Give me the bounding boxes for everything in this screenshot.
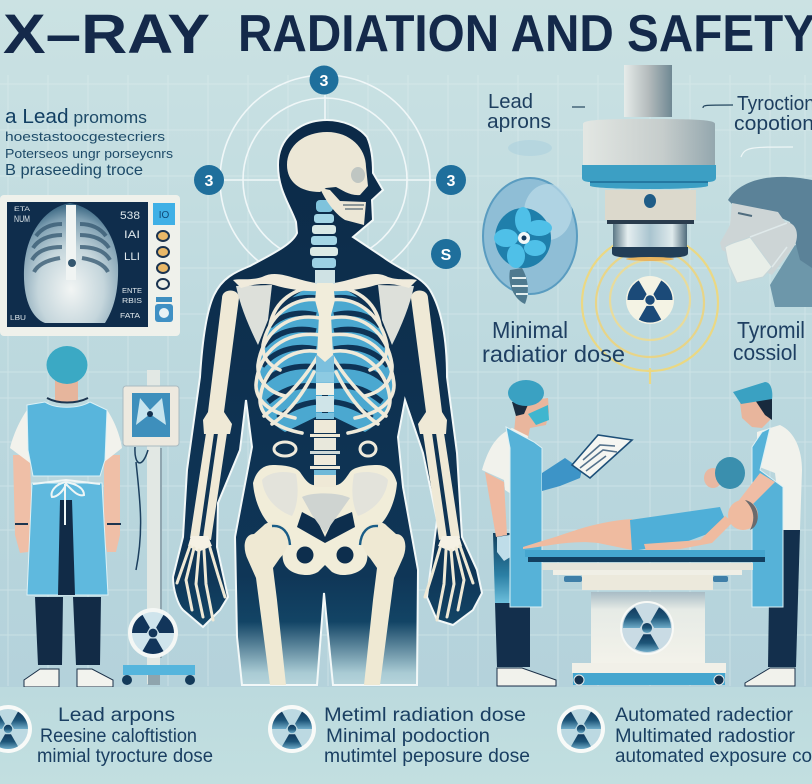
figure: patient lying on table [523, 500, 758, 551]
badge: left: 3 [205, 173, 214, 190]
trousers [35, 597, 101, 665]
control buttons [153, 203, 175, 322]
lower apron back [493, 533, 512, 603]
badge: lower right: S [441, 247, 452, 264]
surgical mask [528, 405, 549, 425]
glove [497, 535, 512, 561]
equipment: stand with monitor [122, 370, 195, 685]
head [728, 500, 758, 530]
glow rings: radiation beam [582, 235, 718, 384]
screen readouts [10, 207, 142, 322]
target rings around head [220, 75, 445, 285]
head and neck [514, 398, 549, 438]
illustration: glass sphere with radiation [483, 140, 577, 304]
tabletop [525, 550, 765, 557]
blue glove hand [542, 458, 582, 491]
text: Multimated radostior [615, 726, 796, 747]
base with wheels [123, 665, 195, 675]
leader lines [572, 105, 793, 157]
cap [46, 346, 88, 384]
arm [733, 473, 775, 512]
face [740, 400, 772, 428]
screen readouts: ENTE [122, 288, 142, 295]
apron [752, 428, 783, 607]
screen readouts: ETA [14, 207, 30, 213]
neck [55, 380, 78, 402]
text block: upper left notes: B praseeding troce [5, 162, 143, 179]
text block: upper left notes: Poterseos ungr porseycnrs [5, 146, 174, 161]
label: tyromil cossiol: cossiol [733, 340, 797, 365]
label: lead aprons: Lead [488, 91, 533, 113]
text: Minimal podoction [326, 726, 490, 747]
icon: radiation [557, 705, 605, 753]
screen readouts: NUM [14, 214, 30, 224]
footer item: lead aprons [0, 705, 213, 767]
radiation sign [128, 608, 178, 658]
shoes [24, 669, 113, 687]
equipment: x-ray tube head [582, 65, 716, 261]
radiation sign [620, 601, 674, 655]
neck [770, 245, 812, 307]
badge: left [194, 165, 224, 195]
text [324, 705, 530, 767]
figure: technician in lead apron, back view [10, 346, 122, 687]
text [615, 705, 812, 767]
spine [310, 200, 340, 487]
cap [733, 382, 772, 404]
trousers [768, 530, 800, 667]
label: minimal radiation dose: radiatior dose [482, 341, 625, 367]
skeleton left half [177, 274, 325, 685]
text block: upper left notes [5, 106, 174, 179]
text: automated exposure co [615, 746, 812, 767]
shirt [482, 428, 528, 500]
icon: radiation [0, 705, 32, 753]
arm [644, 516, 733, 551]
mask [725, 237, 772, 283]
housing [583, 119, 715, 166]
hair [512, 400, 530, 416]
text: Lead arpons [58, 705, 175, 726]
icon: radiation [268, 705, 316, 753]
figure: technician with clipboard [482, 380, 632, 686]
screen readouts: RBIS [122, 298, 142, 305]
figure: patient head with cap [704, 457, 745, 489]
screen readouts: LBU [10, 315, 26, 322]
pole [147, 370, 160, 684]
kidney right [360, 442, 376, 456]
label: lead aprons [487, 91, 551, 133]
label: minimal radiation dose: Minimal [492, 317, 568, 343]
column [624, 65, 672, 117]
shirt [757, 425, 802, 530]
neck [605, 190, 696, 220]
cable [135, 447, 148, 570]
badge: top: 3 [320, 73, 329, 90]
legs [523, 519, 632, 550]
apron slit [58, 500, 75, 595]
title: X–RAY [3, 2, 210, 65]
label: minimal radiation dose [482, 317, 625, 367]
footer item: automated reduction [557, 705, 812, 767]
footer item: minimal radiation dose [268, 705, 530, 767]
lens [613, 224, 687, 247]
figure: skeleton body [173, 120, 482, 685]
arm [485, 472, 507, 537]
skeleton right half [325, 274, 473, 685]
screen readouts: IAI [124, 229, 140, 241]
label: tyroction: copotion [734, 113, 812, 135]
shoes [745, 668, 795, 686]
apron [506, 427, 542, 607]
pedestal [591, 592, 705, 663]
text [37, 705, 213, 767]
text: Metiml radiation dose [324, 705, 526, 726]
body silhouette [173, 120, 482, 685]
x-ray image of chest [24, 203, 118, 323]
skull [287, 132, 368, 225]
blue band [582, 165, 716, 189]
badge: top [310, 66, 338, 94]
text block: upper left notes: hoestastoocgestecriers [5, 130, 165, 144]
arms [13, 455, 120, 553]
trousers [495, 603, 530, 667]
equipment: x-ray table [525, 550, 765, 685]
base plate [572, 663, 726, 673]
shirt [10, 410, 122, 463]
badge: right: 3 [447, 173, 456, 190]
apron top [27, 402, 107, 476]
kidney left [274, 442, 296, 456]
screen readouts: 538 [120, 210, 140, 222]
text: Automated radectior [615, 705, 794, 726]
text: mutimtel peposure dose [324, 746, 530, 767]
label: tyromil cossiol: Tyromil [737, 317, 805, 343]
label: tyromil cossiol [733, 317, 805, 365]
cap [508, 380, 544, 406]
sacrum [302, 493, 350, 533]
stand monitor [123, 386, 179, 446]
text block: upper left notes: a Lead promoms [5, 106, 147, 128]
footer band [0, 687, 812, 784]
sternum [315, 283, 335, 362]
badge: right [436, 165, 466, 195]
control buttons: IO [159, 210, 169, 221]
screen readouts: LLI [124, 251, 140, 263]
pelvic opening [297, 512, 355, 543]
illustration: masked profile face [720, 177, 812, 307]
title [3, 2, 812, 65]
radiation symbol in beam [626, 276, 674, 324]
badge: lower right [431, 239, 461, 269]
apron tie [33, 480, 100, 525]
torso [630, 507, 724, 551]
text: mimial tyrocture dose [37, 746, 213, 767]
figure: technician at patient's head [733, 382, 802, 686]
screen readouts: FATA [120, 313, 140, 320]
clipboard [572, 435, 632, 478]
shoes [497, 668, 556, 686]
apron skirt [27, 483, 108, 595]
face [720, 203, 797, 275]
label: tyroction [734, 93, 812, 135]
monitor: chest x-ray display [0, 195, 180, 336]
text: Reesine caloftistion [40, 726, 197, 747]
label: lead aprons: aprons [487, 111, 551, 133]
hair [728, 177, 812, 268]
